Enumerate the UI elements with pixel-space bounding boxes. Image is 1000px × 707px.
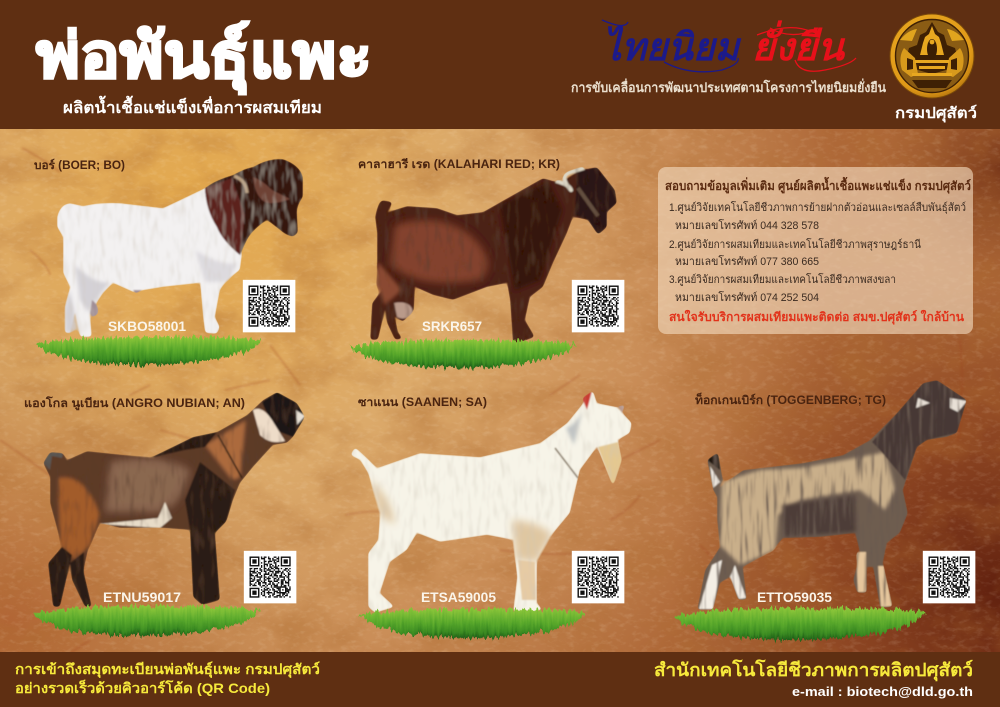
QR code: Anglo Nubian <box>244 551 296 603</box>
panel: contact information: หมายเลขโทรศัพท์ 074 252 504 <box>675 290 819 304</box>
goat: Saanen <box>350 390 632 613</box>
grass: Saanen <box>360 609 587 638</box>
code: SKBO58001: SKBO58001 <box>108 318 186 334</box>
icon: department seal <box>890 14 974 98</box>
grass: Toggenberg <box>674 608 926 640</box>
footer right text: e-mail : biotech@dld.go.th <box>792 684 973 699</box>
goat: Toggenberg <box>697 380 967 610</box>
goat: Boer <box>57 159 303 337</box>
subtitle: ผลิตน้ำเชื้อแช่แข็งเพื่อการผสมเทียม <box>63 95 322 117</box>
grass mounds <box>33 337 926 640</box>
grass: Anglo Nubian <box>33 606 260 636</box>
footer left text: อย่างรวดเร็วด้วยคิวอาร์โค้ด (QR Code) <box>15 679 270 696</box>
QR code: Toggenberg <box>923 551 975 603</box>
logo: Thai Niyom Yangyuen: ยั่งยืน <box>752 20 846 69</box>
logo: Thai Niyom Yangyuen: ไทยนิยม <box>603 25 742 69</box>
goat: Anglo Nubian <box>43 392 305 607</box>
title: พ่อพันธุ์แพะ <box>36 21 372 94</box>
breed label: Saanen: ซาแนน (SAANEN; SA) <box>358 397 487 409</box>
grass: Kalahari Red <box>350 340 577 368</box>
QR code: Boer <box>243 280 295 332</box>
logo: Thai Niyom Yangyuen <box>602 20 856 72</box>
QR code: Saanen <box>572 551 624 603</box>
code: ETSA59005: ETSA59005 <box>421 589 496 605</box>
footer band <box>0 652 1000 707</box>
panel: contact information: หมายเลขโทรศัพท์ 044 328 578 <box>675 218 819 232</box>
QR code: Kalahari Red <box>572 280 624 332</box>
footer right text <box>654 659 973 699</box>
panel: contact information: หมายเลขโทรศัพท์ 077 380 665 <box>675 254 819 268</box>
footer right text: สำนักเทคโนโลยีชีวภาพการผลิตปศุสัตว์ <box>654 659 973 682</box>
breed label: Boer: บอร์ (BOER; BO) <box>34 158 125 172</box>
breed label: Anglo Nubian: แองโกล นูเบียน (ANGRO NUBIAN; AN) <box>24 395 245 411</box>
panel: contact information <box>658 167 973 334</box>
goat: Kalahari Red <box>370 167 617 345</box>
header band <box>0 0 1000 129</box>
footer left text <box>15 661 320 696</box>
breed label: Toggenberg: ท็อกเกนเบิร์ก (TOGGENBERG; TG) <box>695 392 886 407</box>
breed label: Kalahari Red: คาลาฮารี เรด (KALAHARI RED; KR) <box>358 158 560 171</box>
panel: contact information: 2.ศูนย์วิจัยการผสมเทียมและเทคโนโลยีชีวภาพสุราษฎร์ธานี <box>669 237 921 251</box>
grass: Boer <box>36 337 262 365</box>
code: SRKR657: SRKR657 <box>422 318 482 334</box>
textured background <box>0 129 1000 660</box>
panel: contact information: สนใจรับบริการผสมเทียมแพะติดต่อ สมข.ปศุสัตว์ ใกล้บ้าน <box>669 309 965 325</box>
panel: contact information: 1.ศูนย์วิจัยเทคโนโลยีชีวภาพการย้ายฝากตัวอ่อนและเซลล์สืบพันธุ์สัตว์ <box>669 200 966 214</box>
panel: contact information: สอบถามข้อมูลเพิ่มเติม ศูนย์ผลิตน้ำเชื้อแพะแช่แข็ง กรมปศุสัตว์ <box>665 176 971 194</box>
footer left text: การเข้าถึงสมุดทะเบียนพ่อพันธุ์แพะ กรมปศุสัตว์ <box>15 661 320 678</box>
department name: กรมปศุสัตว์ <box>895 104 977 123</box>
panel: contact information: 3.ศูนย์วิจัยการผสมเทียมและเทคโนโลยีชีวภาพสงขลา <box>669 272 896 286</box>
code: ETNU59017: ETNU59017 <box>103 589 181 605</box>
code: ETTO59035: ETTO59035 <box>757 589 832 605</box>
logo caption: การขับเคลื่อนการพัฒนาประเทศตามโครงการไทยนิยมยั่งยืน <box>571 78 886 95</box>
